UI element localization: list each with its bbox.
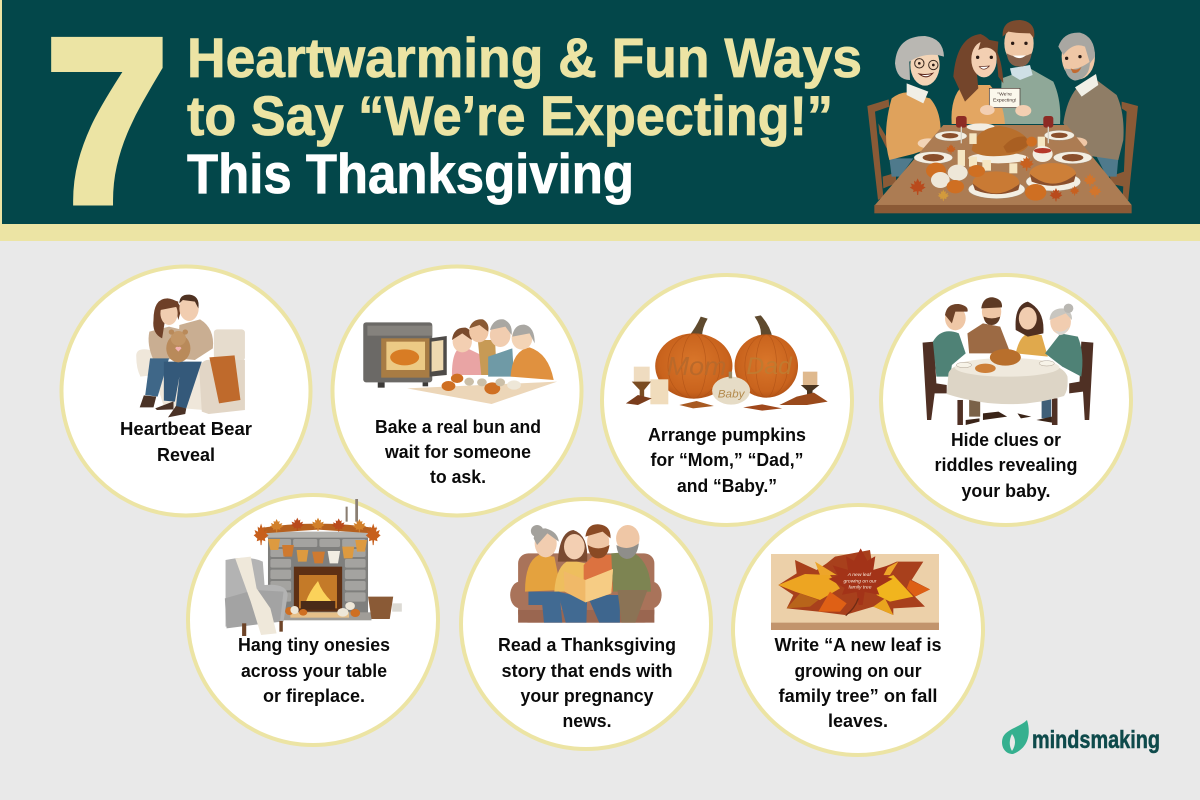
caption: Hide clues or [951, 430, 1061, 450]
header banner [0, 0, 1200, 241]
title [187, 26, 862, 205]
logo: mindsmaking [1002, 720, 1160, 754]
caption: Write “A new leaf is [774, 635, 942, 655]
panel: arrange pumpkins [602, 275, 852, 525]
illustration: family watching oven [363, 319, 557, 404]
illustration: family reading on sofa [510, 524, 662, 623]
caption: for “Mom,” “Dad,” [650, 450, 804, 470]
illustration: fireplace with onesie banner [225, 499, 402, 636]
caption: your pregnancy [520, 686, 654, 706]
caption: growing on our [794, 661, 922, 681]
caption: family tree” on fall [778, 686, 938, 706]
grandmother [886, 36, 944, 160]
caption [648, 425, 806, 496]
panel: read a story [461, 499, 711, 749]
illustration: carved pumpkins: Mom [667, 351, 726, 381]
illustration: autumn leaves on wood: A new leaf [847, 572, 871, 578]
illustration: carved pumpkins: Dad [746, 353, 793, 380]
caption [934, 430, 1078, 501]
title: to Say “We’re Expecting!” [187, 84, 833, 147]
caption: Read a Thanksgiving [498, 635, 676, 655]
logo: mindsmaking: mindsmaking [1032, 726, 1160, 754]
caption [774, 635, 942, 731]
icon: leaf [1002, 720, 1029, 754]
card: Expecting! [993, 97, 1016, 103]
panel: bake a real bun [332, 266, 582, 516]
panel: hang tiny onesies [188, 495, 438, 745]
caption: news. [562, 711, 612, 731]
card [989, 88, 1020, 108]
panel: write on leaves [733, 505, 983, 755]
caption: Bake a real bun and [375, 417, 541, 437]
caption: Heartbeat Bear [120, 419, 252, 439]
caption [375, 417, 541, 487]
illustration: family at Thanksgiving table [867, 20, 1138, 213]
title: This Thanksgiving [187, 142, 634, 205]
caption [498, 635, 676, 731]
panel: heartbeat bear [62, 266, 310, 516]
caption: riddles revealing [934, 455, 1078, 475]
panel: hide clues [881, 275, 1131, 525]
caption [120, 419, 252, 465]
caption: to ask. [430, 467, 486, 487]
caption: Arrange pumpkins [648, 425, 806, 445]
caption: and “Baby.” [677, 476, 777, 496]
illustration: couple on sofa with bear [136, 295, 245, 417]
caption [238, 635, 390, 706]
illustration: carved pumpkins [626, 315, 828, 411]
illustration: autumn leaves on wood: growing on our [843, 578, 877, 584]
caption: wait for someone [384, 442, 531, 462]
illustration: autumn leaves on wood: family tree [848, 585, 872, 591]
expecting couple [951, 20, 1060, 124]
illustration: family around round table [923, 297, 1093, 425]
caption: across your table [241, 661, 387, 681]
grandfather [1058, 33, 1124, 160]
illustration: autumn leaves on wood [771, 548, 939, 630]
caption: Reveal [157, 445, 215, 465]
caption: or fireplace. [263, 686, 365, 706]
card: "We're [997, 91, 1012, 97]
caption: leaves. [828, 711, 888, 731]
caption: Hang tiny onesies [238, 635, 390, 655]
illustration: carved pumpkins: Baby [718, 388, 746, 400]
caption: story that ends with [502, 661, 672, 681]
title: Heartwarming & Fun Ways [187, 26, 862, 89]
caption: your baby. [962, 481, 1050, 501]
table with feast [874, 116, 1132, 213]
